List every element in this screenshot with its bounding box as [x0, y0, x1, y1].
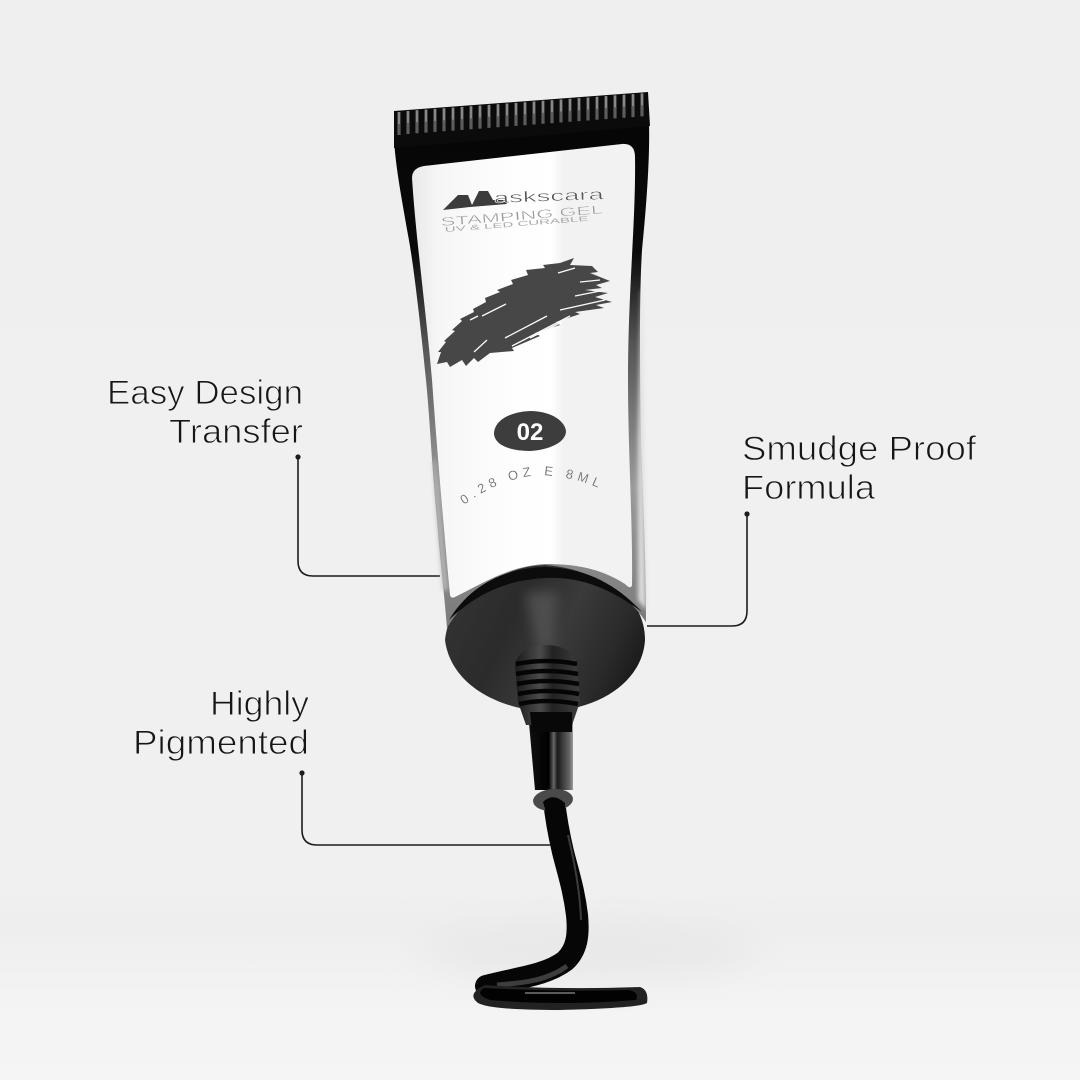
callout: smudge proof formula: Formula	[742, 469, 875, 507]
disc highlight	[525, 592, 558, 650]
tube label	[412, 144, 635, 598]
callout: highly pigmented: Pigmented	[133, 724, 309, 762]
tube left highlight	[433, 460, 448, 590]
threaded nozzle	[515, 645, 580, 732]
product: gel tube	[394, 92, 650, 1010]
callout: highly pigmented: Highly	[210, 685, 309, 723]
product name: STAMPING GEL	[440, 202, 604, 229]
callout: smudge proof formula	[742, 430, 977, 507]
callout: easy design transfer: Transfer	[169, 413, 303, 451]
gel stream	[473, 800, 647, 1010]
callout: highly pigmented	[133, 685, 309, 762]
callout: easy design transfer	[107, 374, 303, 451]
logo mark	[443, 191, 507, 210]
leader line: easy design transfer	[295, 454, 440, 576]
floor shadow	[420, 922, 760, 978]
brush swatch	[437, 258, 612, 367]
tube body	[394, 124, 649, 628]
tube disc	[445, 565, 645, 712]
nozzle neck	[528, 712, 574, 812]
shade badge: 02	[517, 419, 543, 446]
curing note: UV & LED CURABLE	[445, 216, 589, 234]
tube right highlight	[638, 290, 646, 610]
leader line: highly pigmented	[299, 770, 551, 845]
leader line: smudge proof formula	[647, 511, 750, 626]
crimp seal	[394, 92, 650, 148]
disc rim	[449, 567, 642, 620]
callout: easy design transfer: Easy Design	[107, 374, 303, 412]
brand name: askscara	[494, 186, 605, 207]
shade badge	[494, 411, 566, 451]
callout: smudge proof formula: Smudge Proof	[742, 430, 977, 468]
volume text: 0.28 OZ E 8ML	[460, 466, 598, 504]
